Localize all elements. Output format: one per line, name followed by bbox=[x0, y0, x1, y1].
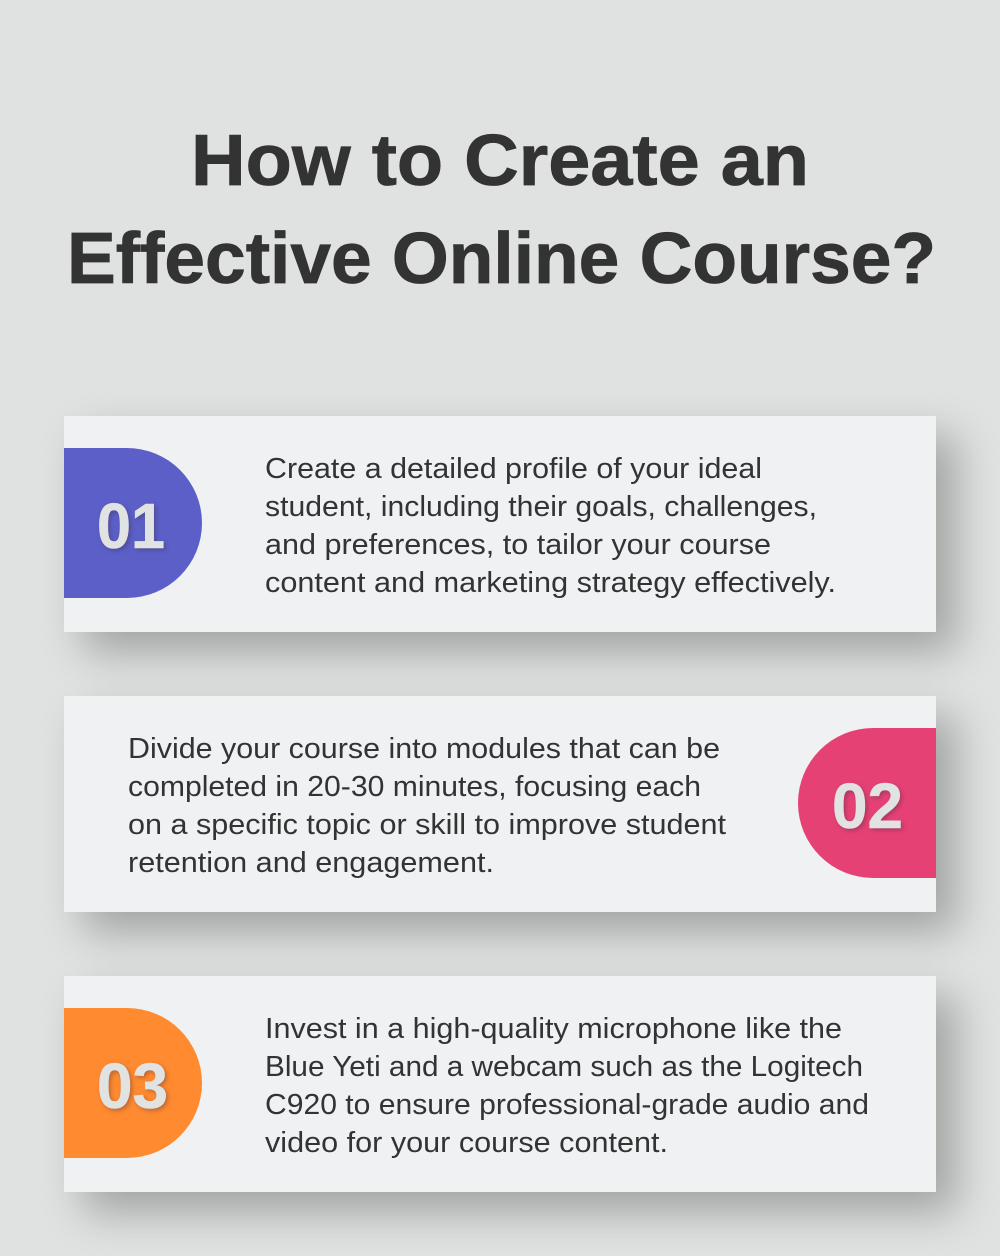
text block: step 03 description: C920 to ensure professional-grade audio and bbox=[265, 1089, 869, 1121]
text block: step 03 description: Invest in a high-quality microphone like the bbox=[265, 1013, 842, 1045]
badge: 03: 03 bbox=[97, 1050, 168, 1122]
title: Effective Online Course? bbox=[67, 219, 936, 299]
text block: step 01 description: student, including their goals, challenges, bbox=[265, 491, 817, 523]
text block: step 02 description bbox=[128, 733, 726, 878]
text block: step 03 description bbox=[265, 1013, 869, 1158]
panel: step 01 bbox=[64, 416, 936, 632]
badge: 01 bbox=[64, 448, 202, 598]
text block: step 02 description: Divide your course into modules that can be bbox=[128, 733, 720, 765]
text block: step 01 description: and preferences, to tailor your course bbox=[265, 529, 771, 561]
text block: step 02 description: on a specific topic or skill to improve student bbox=[128, 809, 726, 841]
badge: 02 bbox=[798, 728, 936, 878]
text block: step 03 description: Blue Yeti and a webcam such as the Logitech bbox=[265, 1051, 863, 1083]
panel: step 03 bbox=[64, 976, 936, 1192]
badge: 03 bbox=[64, 1008, 202, 1158]
badge: 02: 02 bbox=[832, 770, 903, 842]
badge: 01: 01 bbox=[97, 490, 165, 562]
text block: step 01 description: Create a detailed profile of your ideal bbox=[265, 453, 762, 485]
title bbox=[67, 121, 936, 299]
text block: step 02 description: completed in 20-30 minutes, focusing each bbox=[128, 771, 701, 803]
title: How to Create an bbox=[191, 121, 809, 201]
text block: step 01 description bbox=[265, 453, 836, 598]
panel: step 02 bbox=[64, 696, 936, 912]
